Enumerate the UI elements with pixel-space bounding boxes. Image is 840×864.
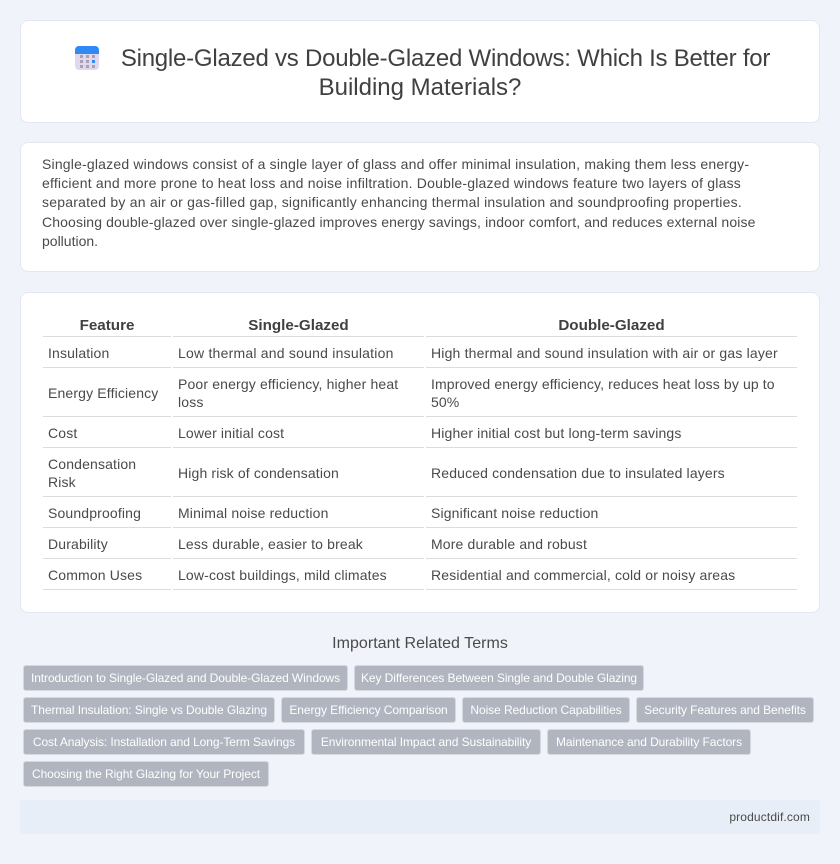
row: condensation risk [48, 456, 725, 490]
intro text: pollution. [42, 233, 98, 249]
row: energy efficiency: Poor energy efficiency, higher heat [178, 376, 398, 392]
row: soundproofing: Soundproofing [48, 505, 141, 521]
icon: calendar [75, 46, 99, 70]
panel: intro [20, 142, 820, 272]
title: Building Materials? [319, 74, 521, 101]
title [121, 45, 770, 101]
row: energy efficiency: Improved energy efficiency, reduces heat loss by up to [431, 376, 775, 392]
row: condensation risk: Risk [48, 474, 76, 490]
row: soundproofing: Significant noise reduction [431, 505, 598, 521]
tag [636, 697, 814, 723]
row: energy efficiency: Energy Efficiency [48, 385, 158, 401]
panel: header [20, 20, 820, 123]
header: feature: Feature [80, 317, 134, 334]
tag [23, 761, 269, 787]
footer [20, 800, 820, 834]
header: double-glazed: Double-Glazed [558, 317, 665, 334]
row: common uses: Residential and commercial, cold or noisy areas [431, 567, 735, 583]
tag: Maintenance and Durability Factors [556, 735, 742, 749]
row: soundproofing [48, 505, 598, 521]
title: Single-Glazed vs Double-Glazed Windows: Which Is Better for [121, 45, 770, 72]
tag: Energy Efficiency Comparison [289, 703, 448, 717]
row: energy efficiency [48, 376, 775, 410]
row: cost: Cost [48, 425, 77, 441]
row: insulation [48, 345, 778, 361]
tag: Environmental Impact and Sustainability [321, 735, 531, 749]
tag [547, 729, 751, 755]
row: durability [48, 536, 587, 552]
intro text: Single-glazed windows consist of a single layer of glass and offer minimal insulation, making them less energy- [42, 156, 749, 172]
tag: Choosing the Right Glazing for Your Project [32, 767, 260, 781]
panel: comparison table [20, 292, 820, 613]
row: durability: Durability [48, 536, 108, 552]
row: common uses [48, 567, 735, 583]
row: common uses: Common Uses [48, 567, 142, 583]
intro text: separated by an air or gas-filled gap, significantly enhancing thermal insulation and soundproofing properties. [42, 194, 742, 210]
tag: Key Differences Between Single and Double Glazing [361, 671, 637, 685]
row: energy efficiency: loss [178, 394, 204, 410]
row: durability: Less durable, easier to break [178, 536, 363, 552]
row: soundproofing: Minimal noise reduction [178, 505, 329, 521]
intro text [42, 156, 755, 249]
row: insulation: High thermal and sound insulation with air or gas layer [431, 345, 778, 361]
tag [311, 729, 541, 755]
table [43, 317, 797, 590]
tag [462, 697, 630, 723]
tag [354, 665, 644, 691]
tag: Thermal Insulation: Single vs Double Glazing [31, 703, 267, 717]
row: condensation risk: Reduced condensation due to insulated layers [431, 465, 725, 481]
tag [23, 665, 348, 691]
row: cost: Lower initial cost [178, 425, 284, 441]
row: insulation: Insulation [48, 345, 109, 361]
tag: Noise Reduction Capabilities [470, 703, 622, 717]
row: insulation: Low thermal and sound insulation [178, 345, 394, 361]
row: durability: More durable and robust [431, 536, 587, 552]
tag [281, 697, 456, 723]
row: cost: Higher initial cost but long-term savings [431, 425, 681, 441]
tag [23, 697, 275, 723]
row: energy efficiency: 50% [431, 394, 459, 410]
tags [23, 665, 814, 787]
tag [23, 729, 305, 755]
row: cost [48, 425, 681, 441]
header: single-glazed: Single-Glazed [248, 317, 349, 334]
footer: productdif.com [729, 810, 810, 824]
tag: Introduction to Single-Glazed and Double-Glazed Windows [31, 671, 340, 685]
tag: Cost Analysis: Installation and Long-Term Savings [33, 735, 295, 749]
intro text: efficient and more prone to heat loss and noise infiltration. Double-glazed windows feature two layers of glass [42, 175, 741, 191]
row: condensation risk: High risk of condensation [178, 465, 339, 481]
intro text: Choosing double-glazed over single-glazed improves energy savings, indoor comfort, and reduces external noise [42, 214, 755, 230]
heading: related terms: Important Related Terms [332, 635, 508, 652]
tag: Security Features and Benefits [644, 703, 806, 717]
row: condensation risk: Condensation [48, 456, 136, 472]
row: common uses: Low-cost buildings, mild climates [178, 567, 387, 583]
